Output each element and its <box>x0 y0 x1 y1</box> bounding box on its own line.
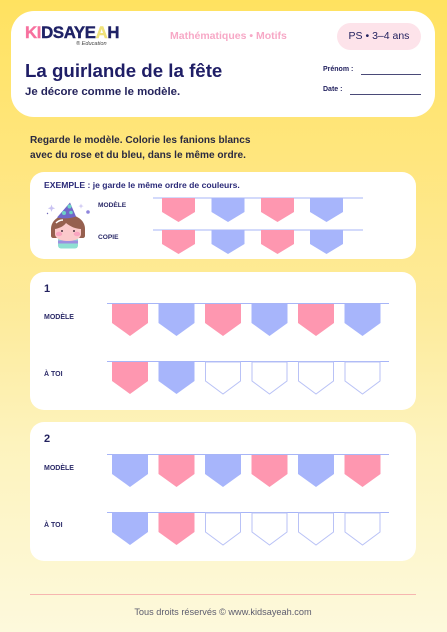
label: copie: COPIE <box>98 234 119 241</box>
date field: Date : <box>323 86 342 93</box>
title: La guirlande de la fête <box>25 60 222 81</box>
garland: exercise 2 model <box>107 454 389 487</box>
label: modele: MODÈLE <box>98 202 126 209</box>
panel: exercise 2 <box>30 422 416 561</box>
example caption: EXEMPLE : je garde le même ordre de couleurs. <box>44 180 240 190</box>
label: model: MODÈLE <box>44 314 74 321</box>
exercise number: 1 <box>44 283 50 295</box>
footer rule <box>30 594 416 595</box>
level badge: PS • 3–4 ans <box>349 30 409 42</box>
header panel <box>11 11 435 117</box>
level badge <box>337 23 421 50</box>
panel: exercise 1 <box>30 272 416 410</box>
logo: ® Education <box>76 41 107 47</box>
label: your turn: À TOI <box>44 522 63 529</box>
exercise number: 2 <box>44 433 50 445</box>
subtitle: Je décore comme le modèle. <box>25 86 180 98</box>
instructions <box>30 135 250 160</box>
label: model: MODÈLE <box>44 465 74 472</box>
panel: example <box>30 172 416 259</box>
icon: party girl <box>46 202 90 248</box>
garland: example copy <box>153 230 363 254</box>
logo: KIDSAYEAH <box>25 23 119 42</box>
garland: exercise 2 to colour <box>107 512 389 545</box>
subject label: Mathématiques • Motifs <box>170 30 287 42</box>
name field: Prénom : <box>323 66 353 73</box>
instructions: Regarde le modèle. Colorie les fanions blancs <box>30 135 250 146</box>
garland: example model <box>153 198 363 222</box>
label: your turn: À TOI <box>44 371 63 378</box>
garland: exercise 1 to colour <box>107 362 389 394</box>
footer text: Tous droits réservés © www.kidsayeah.com <box>134 607 312 617</box>
garland: exercise 1 model <box>107 304 389 336</box>
instructions: avec du rose et du bleu, dans le même ordre. <box>30 150 246 160</box>
